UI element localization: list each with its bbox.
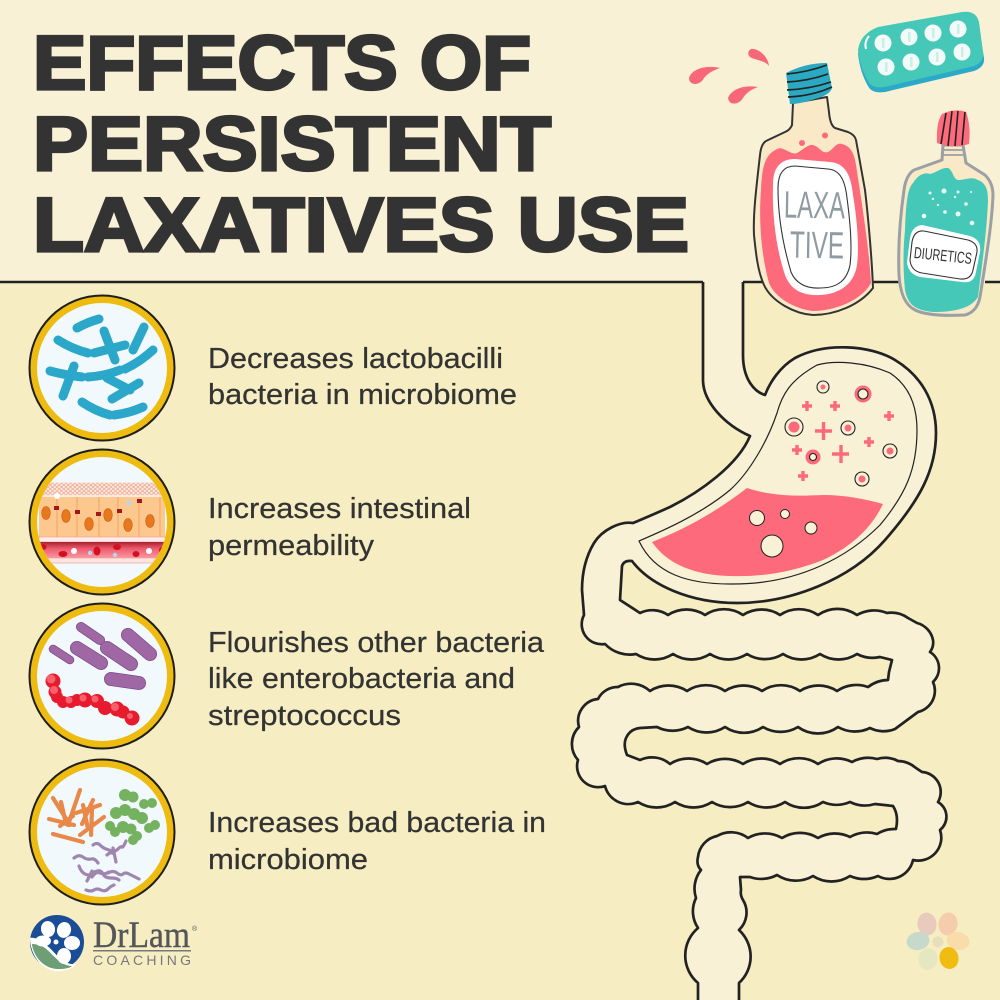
- text: other bacteria flourish: [208, 627, 545, 732]
- text: bad bacteria: [208, 807, 546, 876]
- logo flower mark: [30, 915, 84, 971]
- panel: intestinal permeability: [30, 450, 471, 594]
- background: header band: [0, 0, 1000, 282]
- stomach gas rings: [785, 381, 897, 486]
- icon: laxative bottle: TIVE: [790, 225, 844, 268]
- panel: bad bacteria: [30, 760, 546, 904]
- text: intestinal permeability: [208, 493, 471, 562]
- title: EFFECTS OF: [33, 21, 531, 106]
- logo: DrLam Coaching: DrLam: [93, 915, 190, 956]
- logo: DrLam Coaching: [30, 915, 198, 971]
- acid bubbles: [750, 510, 817, 557]
- icon: mixed bad bacteria circle: [30, 760, 174, 904]
- flower watermark: [905, 911, 971, 972]
- pink liquid: [760, 144, 871, 311]
- text: other bacteria flourish: Flourishes other bacteria: [208, 627, 545, 659]
- pink bottle cap: [937, 110, 970, 146]
- header divider line: [0, 281, 1000, 283]
- panel: decreases lactobacilli: [30, 296, 517, 440]
- icon: enterobacteria and streptococcus circle: [30, 604, 174, 748]
- text: intestinal permeability: Increases intestinal: [208, 493, 471, 525]
- title: LAXATIVES USE: [33, 183, 689, 268]
- logo: DrLam Coaching: COACHING: [93, 952, 191, 968]
- text: bad bacteria: Increases bad bacteria in: [208, 807, 546, 839]
- panel: other bacteria flourish: [30, 604, 545, 748]
- title: [33, 21, 689, 268]
- title: PERSISTENT: [33, 102, 551, 187]
- stomach inner lining: [639, 362, 917, 584]
- logo: DrLam Coaching: ®: [192, 925, 198, 933]
- text: decreases lactobacilli: bacteria in microbiome: [208, 379, 517, 411]
- text: other bacteria flourish: like enterobacteria and: [208, 663, 515, 695]
- teal liquid: [904, 168, 988, 312]
- text: decreases lactobacilli: Decreases lactobacilli: [208, 343, 503, 375]
- blue bottle cap: [786, 63, 832, 104]
- label: [773, 159, 858, 295]
- label: [907, 225, 980, 282]
- icon: laxative bottle: [754, 63, 873, 315]
- icon: pill blister pack: [858, 12, 984, 92]
- icon: intestinal wall cross-section circle: [30, 450, 174, 594]
- text: intestinal permeability: permeability: [208, 530, 375, 562]
- icon: laxative bottle: LAXA: [784, 184, 846, 228]
- icon: pink splash drops: [689, 49, 769, 104]
- icon: rod bacteria circle: [30, 296, 174, 440]
- text: other bacteria flourish: streptococcus: [208, 700, 401, 732]
- icon: diuretics bottle: [899, 110, 993, 315]
- digestive tract: esophagus, stomach and intestine outline: [572, 282, 946, 1000]
- stomach acid: [652, 488, 883, 576]
- text: bad bacteria: microbiome: [208, 844, 368, 876]
- icon: diuretics bottle: DIURETICS: [913, 245, 973, 268]
- text: decreases lactobacilli: [208, 343, 517, 411]
- stomach plus signs: [792, 401, 894, 481]
